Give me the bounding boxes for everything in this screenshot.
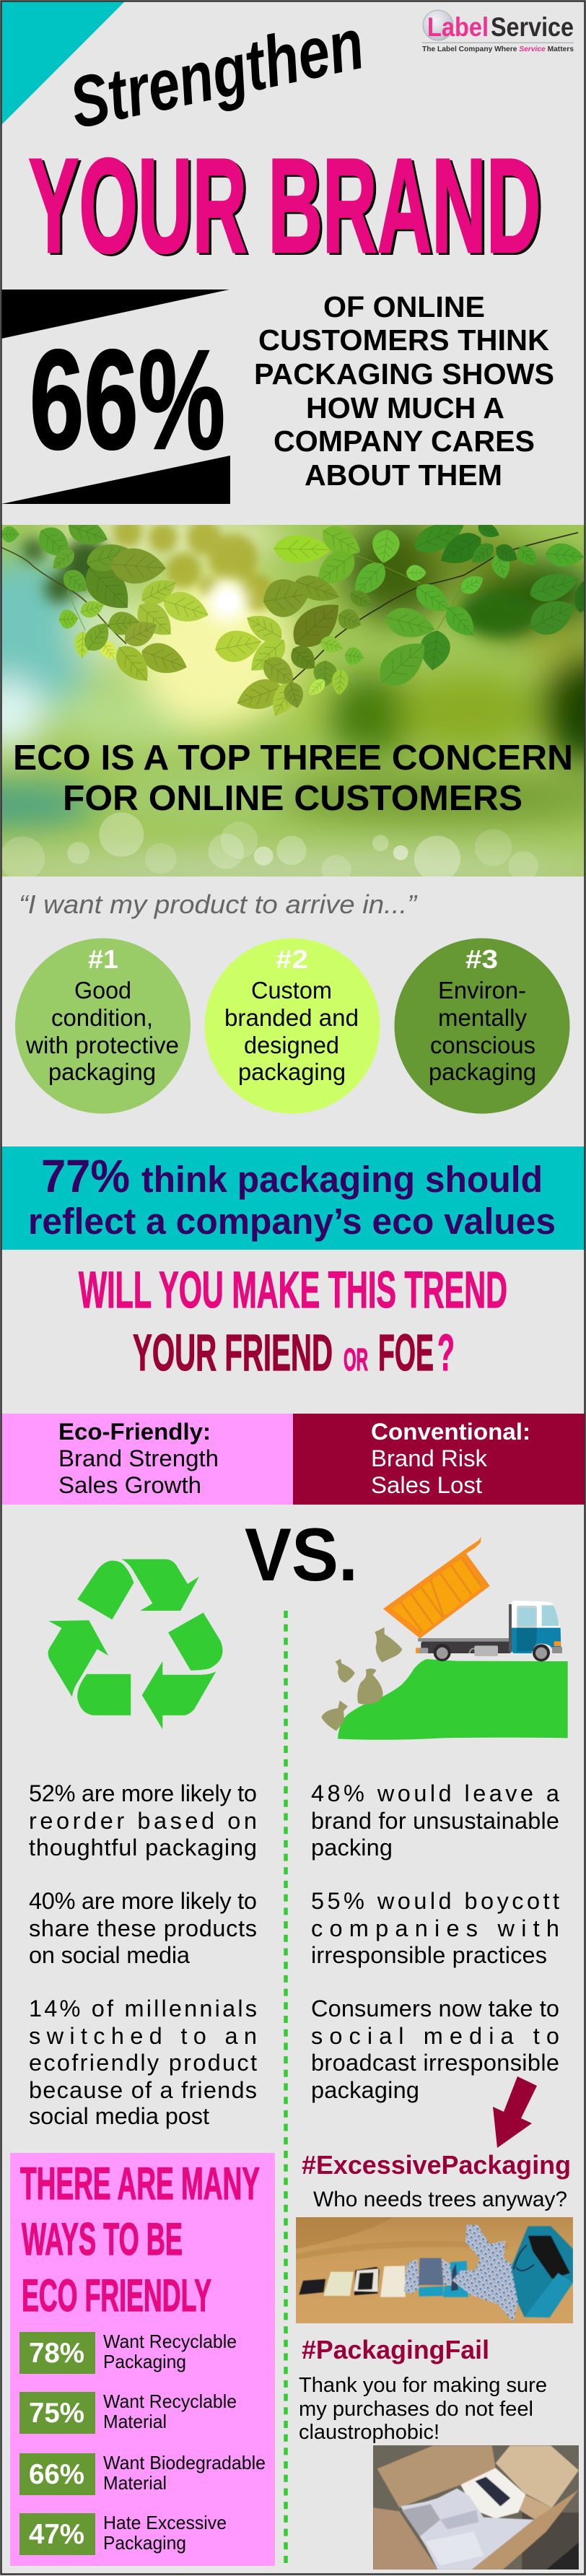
blurred background leaves [113, 518, 275, 611]
right leaf cluster [274, 514, 586, 710]
text: thank you [299, 2374, 547, 2444]
hashtag: ExcessivePackaging: #ExcessivePackaging [302, 2150, 571, 2180]
text: left column stats: switched to an [29, 2023, 257, 2049]
heading: many ways to be eco friendly: THERE ARE MANY [20, 2159, 260, 2209]
banner: 77%: think packaging should [141, 1159, 543, 1200]
stat: 66%: 66% [30, 321, 225, 479]
text: left column stats: 14% of millennials [29, 1996, 257, 2022]
icon: dump truck on hill [321, 1537, 568, 1740]
icon: recycle symbol [48, 1559, 223, 1729]
text: right column stats: 48% would leave a [311, 1780, 560, 1806]
black wedge top [1, 290, 229, 339]
text: of online customers [254, 290, 554, 492]
text: of online customers: ABOUT THEM [305, 458, 502, 492]
heading: eco is a top three concern: ECO IS A TOP THREE CONCERN [13, 739, 573, 778]
text: right column stats: social media to [311, 2023, 559, 2049]
circle #1: condition, [51, 1004, 153, 1031]
text: right column stats: brand for unsustainable [311, 1808, 559, 1834]
hashtag: PackagingFail: #PackagingFail [302, 2335, 489, 2364]
text: right column stats [311, 1780, 560, 2103]
text: left column stats: thoughtful packaging [29, 1835, 257, 1861]
photo: excessive packaging items [296, 2217, 573, 2323]
stat row 66%: 66% [29, 2459, 84, 2490]
circle #3: mentally [438, 1004, 527, 1031]
text: left column stats: reorder based on [29, 1808, 257, 1834]
text: left column stats: because of a friends [29, 2077, 257, 2103]
heading: will you make this trend [79, 1262, 507, 1382]
panel: conventional: Brand Risk [371, 1445, 488, 1471]
circle #3: #3 [465, 944, 498, 974]
panel: conventional: Conventional: [371, 1419, 530, 1445]
stat row 75%: Want Recyclable [103, 2390, 237, 2412]
heading: will you make this trend: YOUR FRIEND [133, 1325, 333, 1382]
text: right column stats: broadcast irresponsible [311, 2050, 559, 2076]
banner: 77%: reflect a company’s eco values [28, 1201, 556, 1242]
heading: eco is a top three concern: FOR ONLINE CUSTOMERS [63, 779, 522, 818]
text: of online customers: OF ONLINE [323, 290, 485, 323]
heading: many ways to be eco friendly: ECO FRIENDLY [22, 2271, 211, 2321]
text: of online customers: CUSTOMERS THINK [258, 323, 549, 357]
heading: many ways to be eco friendly [20, 2159, 260, 2321]
text: thank you: my purchases do not feel [299, 2398, 533, 2421]
panel: eco-friendly: Brand Strength [58, 1445, 219, 1471]
text: left column stats: ecofriendly product [29, 2050, 257, 2076]
logo: Label Service: The Label Company Where Service Matters [422, 45, 574, 53]
circle #1: with protective [25, 1032, 179, 1058]
panel: conventional [293, 1414, 585, 1505]
text: right column stats: irresponsible practices [311, 1942, 547, 1968]
circle #2: #2 [276, 944, 308, 974]
heading: will you make this trend: OR [344, 1342, 368, 1378]
text: left column stats: 40% are more likely to [29, 1888, 257, 1914]
heading: VS.: VS. [245, 1513, 358, 1597]
circle #2: Custom [251, 977, 332, 1004]
logo: Label Service: Label [427, 12, 489, 42]
text: right column stats: packing [311, 1835, 393, 1861]
stat row 75% [19, 2390, 237, 2434]
circle #2: packaging [238, 1058, 346, 1085]
text: left column stats: social media post [29, 2103, 209, 2129]
stat row 47%: Packaging [103, 2532, 186, 2554]
text: right column stats: Consumers now take to [311, 1996, 559, 2022]
text: right column stats: 55% would boycott [311, 1888, 559, 1914]
teal corner triangle [1, 1, 125, 125]
circle #1: #1 [88, 944, 118, 974]
icon: waste sacks [321, 1627, 402, 1731]
quote: “I want my product to arrive in...” [19, 889, 418, 919]
circle #1: packaging [48, 1058, 156, 1085]
text: of online customers: HOW MUCH A [306, 391, 504, 425]
circle #3: packaging [429, 1058, 536, 1085]
stat row 66%: Material [103, 2472, 167, 2494]
bokeh [0, 812, 538, 884]
logo: Label Service: Service [491, 12, 574, 42]
panel: eco-friendly: Sales Growth [58, 1472, 201, 1498]
text: of online customers: PACKAGING SHOWS [254, 357, 554, 391]
stat row 78%: Want Recyclable [103, 2331, 237, 2352]
text: right column stats: packaging [311, 2077, 419, 2103]
circle #2 [205, 939, 380, 1113]
panel: eco-friendly [1, 1414, 293, 1505]
stat row 47%: Hate Excessive [103, 2512, 227, 2533]
panel: leaves photo [0, 514, 586, 884]
stat row 66%: Want Biodegradable [103, 2452, 266, 2473]
circle #3: conscious [430, 1032, 535, 1058]
banner: 77%: 77% [41, 1150, 130, 1202]
text: of online customers: COMPANY CARES [274, 425, 535, 458]
circle #1: Good [74, 977, 131, 1004]
text: left column stats [29, 1780, 257, 2129]
heading: will you make this trend: ? [437, 1325, 455, 1382]
heading: many ways to be eco friendly: WAYS TO BE [22, 2214, 183, 2265]
text: thank you: Thank you for making sure [299, 2374, 547, 2397]
left leaf cluster [1, 514, 313, 721]
text: left column stats: on social media [29, 1942, 191, 1968]
circle #3 [394, 939, 570, 1113]
heading: will you make this trend: FOE [378, 1325, 434, 1382]
stat row 66% [19, 2452, 266, 2495]
sun glare [206, 580, 249, 623]
photo: oversized box with bubble wrap [373, 2445, 580, 2570]
circle #3: Environ- [438, 977, 526, 1004]
black wedge bottom [1, 456, 230, 504]
panel: eco-friendly: Eco-Friendly: [58, 1419, 211, 1445]
stat row 78% [19, 2331, 237, 2374]
stat row 47%: 47% [29, 2519, 84, 2550]
arrow pointing down to hashtags [493, 2076, 537, 2148]
stat row 47% [19, 2512, 227, 2555]
panel: conventional: Sales Lost [371, 1472, 482, 1498]
green dashed divider [284, 1611, 288, 2565]
text: right column stats: companies with [311, 1915, 559, 1941]
text: left column stats: share these products [29, 1915, 257, 1941]
heading: eco is a top three concern [13, 739, 573, 818]
text: left column stats: 52% are more likely to [29, 1780, 257, 1806]
logo: Label Service [422, 10, 574, 53]
stat row 75%: Material [103, 2411, 167, 2432]
circle #2: branded and [224, 1004, 359, 1031]
text: who needs trees: Who needs trees anyway? [313, 2188, 567, 2211]
circle #2: designed [244, 1032, 339, 1058]
stat row 78%: 78% [29, 2338, 84, 2369]
banner: 77% [1, 1146, 585, 1250]
circle #1 [15, 939, 191, 1113]
stat row 78%: Packaging [103, 2351, 186, 2372]
stat row 75%: 75% [29, 2398, 84, 2429]
text: thank you: claustrophobic! [299, 2421, 439, 2444]
panel: there are many ways [10, 2153, 275, 2566]
